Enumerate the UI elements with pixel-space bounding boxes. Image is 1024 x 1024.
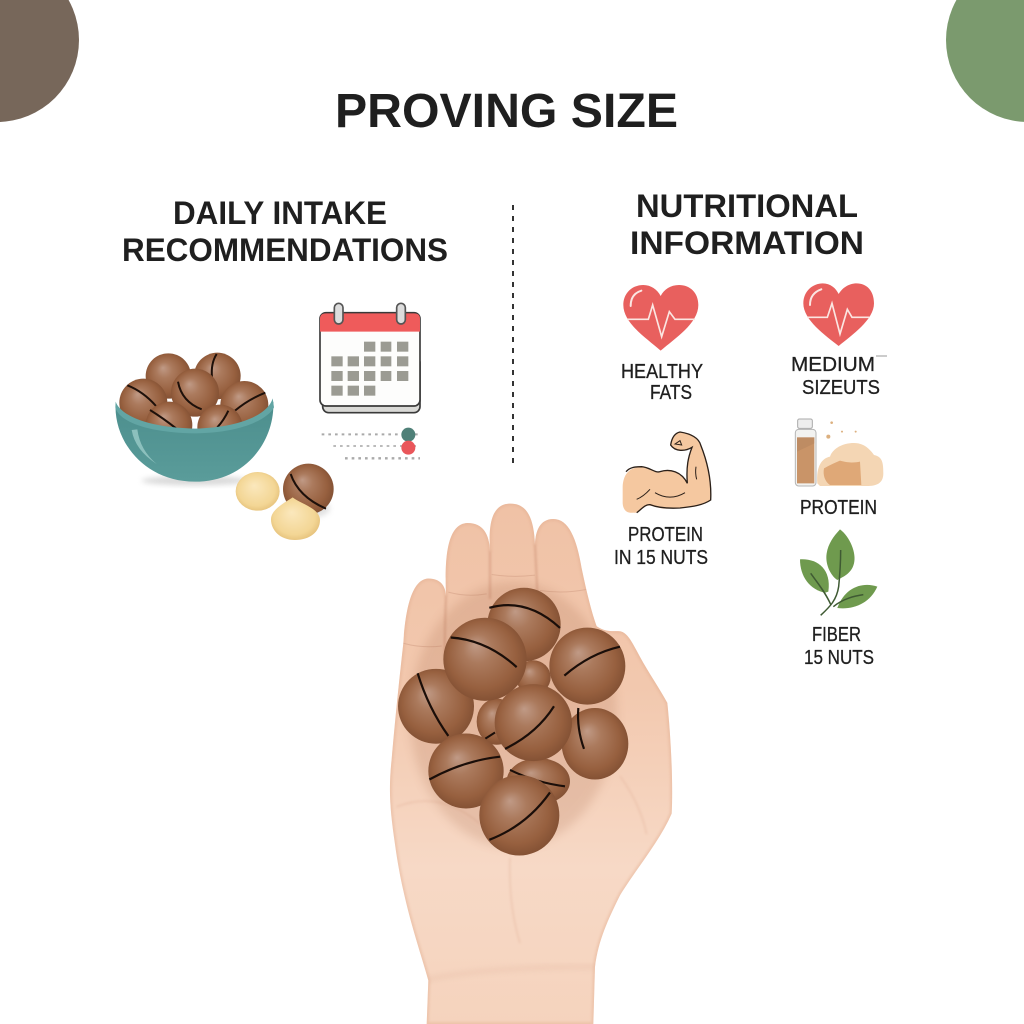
icon: heart medium size [803, 283, 874, 346]
icon: flexed arm [623, 432, 711, 513]
nut group [398, 588, 628, 855]
heading: daily intake recommendations: RECOMMENDATIONS [122, 232, 448, 268]
label: medium size [791, 354, 887, 399]
heading: daily intake recommendations: DAILY INTAKE [173, 195, 387, 231]
title: PROVING SIZE [335, 85, 678, 138]
label: medium size: MEDIUM [791, 354, 875, 376]
icon: loose macadamia nuts [236, 464, 334, 540]
icon: protein bottle and powder [795, 419, 883, 486]
heading: nutritional information [630, 188, 864, 261]
label: fiber 15 nuts: 15 NUTS [804, 647, 874, 669]
label: healthy fats [621, 361, 703, 404]
heading: nutritional information: INFORMATION [630, 225, 864, 261]
label: healthy fats: FATS [650, 382, 692, 404]
icon: leaves [800, 529, 877, 615]
label: protein: PROTEIN [800, 497, 877, 519]
label: protein in 15 nuts: IN 15 NUTS [614, 547, 708, 569]
corner circle: brown [0, 0, 79, 122]
icon: bowl of macadamia nuts [115, 353, 274, 485]
label: medium size: SIZEUTS [802, 377, 880, 399]
label: fiber 15 nuts: FIBER [812, 624, 861, 646]
icon: heart healthy fats [623, 285, 698, 351]
hand holding macadamia nuts [390, 504, 672, 1024]
label: protein in 15 nuts: PROTEIN [628, 524, 703, 546]
icon: calendar [320, 303, 420, 413]
heading: daily intake recommendations [122, 195, 448, 268]
heading: nutritional information: NUTRITIONAL [636, 188, 858, 224]
label: fiber 15 nuts [804, 624, 874, 669]
icon: schedule dots [322, 428, 420, 458]
corner circle: green [946, 0, 1024, 122]
label: protein in 15 nuts [614, 524, 708, 569]
label: healthy fats: HEALTHY [621, 361, 703, 383]
